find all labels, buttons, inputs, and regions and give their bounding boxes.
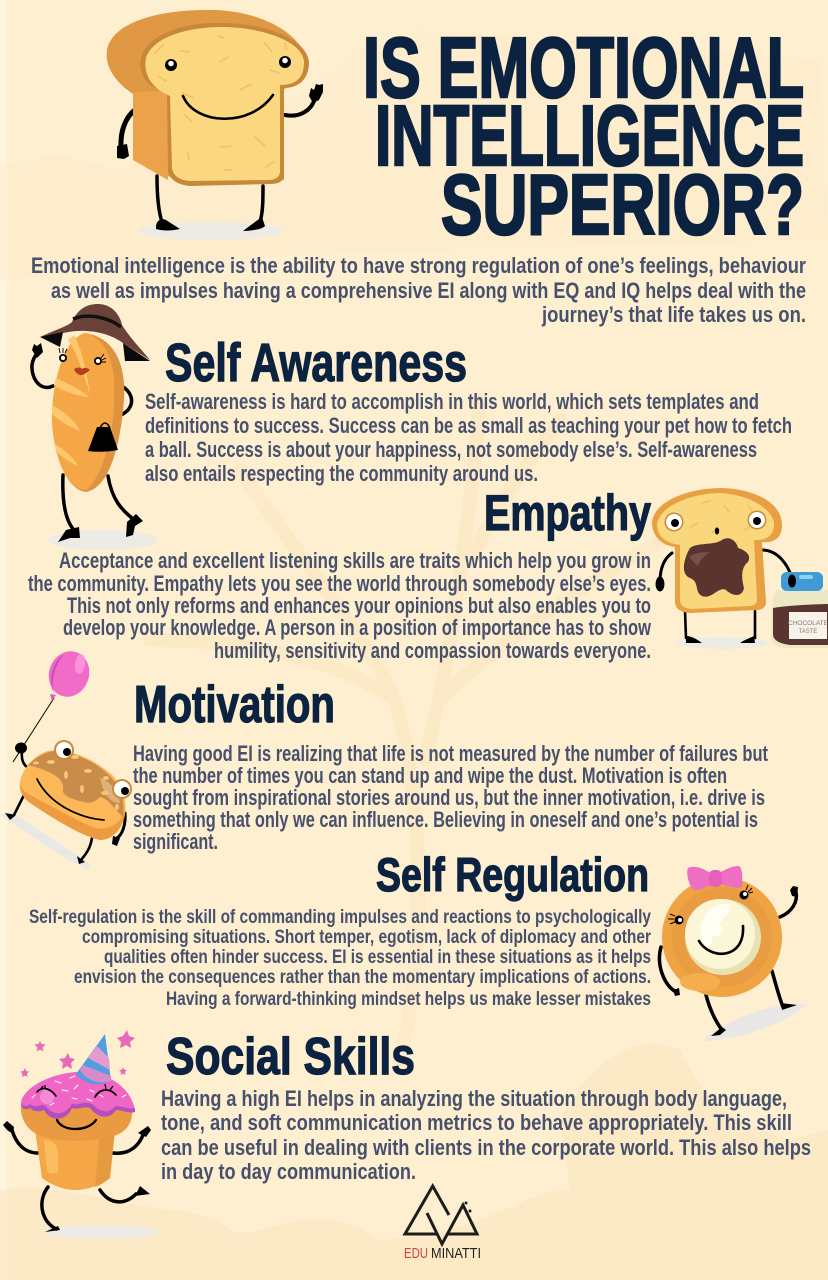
- body text: [29, 907, 651, 1010]
- logo: Edu Minatti: MINATTI: [431, 1245, 481, 1262]
- intro text: [31, 253, 806, 327]
- section: social skills: [161, 1028, 811, 1184]
- body text: compromising situations. Short temper, egotism, lack of diplomacy and other: [82, 927, 651, 948]
- body text: Having a forward-thinking mindset helps us make lesser mistakes: [166, 989, 651, 1010]
- body text: [145, 389, 792, 486]
- body text: This not only reforms and enhances your opinions but also enables you to: [67, 593, 651, 618]
- heading: Motivation: [134, 676, 335, 734]
- body text: [28, 548, 652, 663]
- body text: in day to day communication.: [161, 1159, 416, 1184]
- body text: [133, 741, 769, 854]
- section: empathy: [28, 485, 652, 663]
- character: toast with chocolate spread and jar: [652, 488, 828, 649]
- section: motivation: [133, 676, 769, 854]
- jar: [771, 572, 828, 648]
- character: party muffin: [3, 1030, 160, 1239]
- character: bread waving: [107, 10, 323, 240]
- character: donut with bow: [659, 866, 806, 1041]
- jar: TASTE: [799, 629, 817, 635]
- body text: Self-regulation is the skill of commanding impulses and reactions to psychologically: [29, 907, 651, 928]
- heading: Social Skills: [166, 1028, 415, 1086]
- body text: humility, sensitivity and compassion towards everyone.: [214, 638, 651, 663]
- section: self awareness: [145, 333, 792, 486]
- body text: also entails respecting the community around us.: [145, 461, 538, 486]
- heading: Empathy: [484, 485, 651, 541]
- jar: CHOCOLATE: [788, 620, 828, 627]
- character: sesame bun with balloon: [0, 646, 132, 870]
- body text: significant.: [133, 829, 218, 854]
- character: baguette with hat and bag: [32, 304, 158, 550]
- logo: Edu Minatti: [404, 1186, 481, 1262]
- logo: Edu Minatti: EDU: [404, 1245, 428, 1262]
- body text: Acceptance and excellent listening skills are traits which help you grow in: [59, 548, 651, 573]
- heading: Self Awareness: [165, 333, 467, 393]
- body text: develop your knowledge. A person in a position of importance has to show: [63, 615, 652, 640]
- heading: Self Regulation: [376, 848, 649, 901]
- body text: [161, 1086, 811, 1184]
- body text: qualities often hinder success. EI is essential in these situations as it helps: [104, 947, 651, 968]
- section: self regulation: [29, 848, 651, 1010]
- body text: envision the consequences rather than the momentary implications of actions.: [74, 967, 651, 988]
- title: [363, 21, 804, 253]
